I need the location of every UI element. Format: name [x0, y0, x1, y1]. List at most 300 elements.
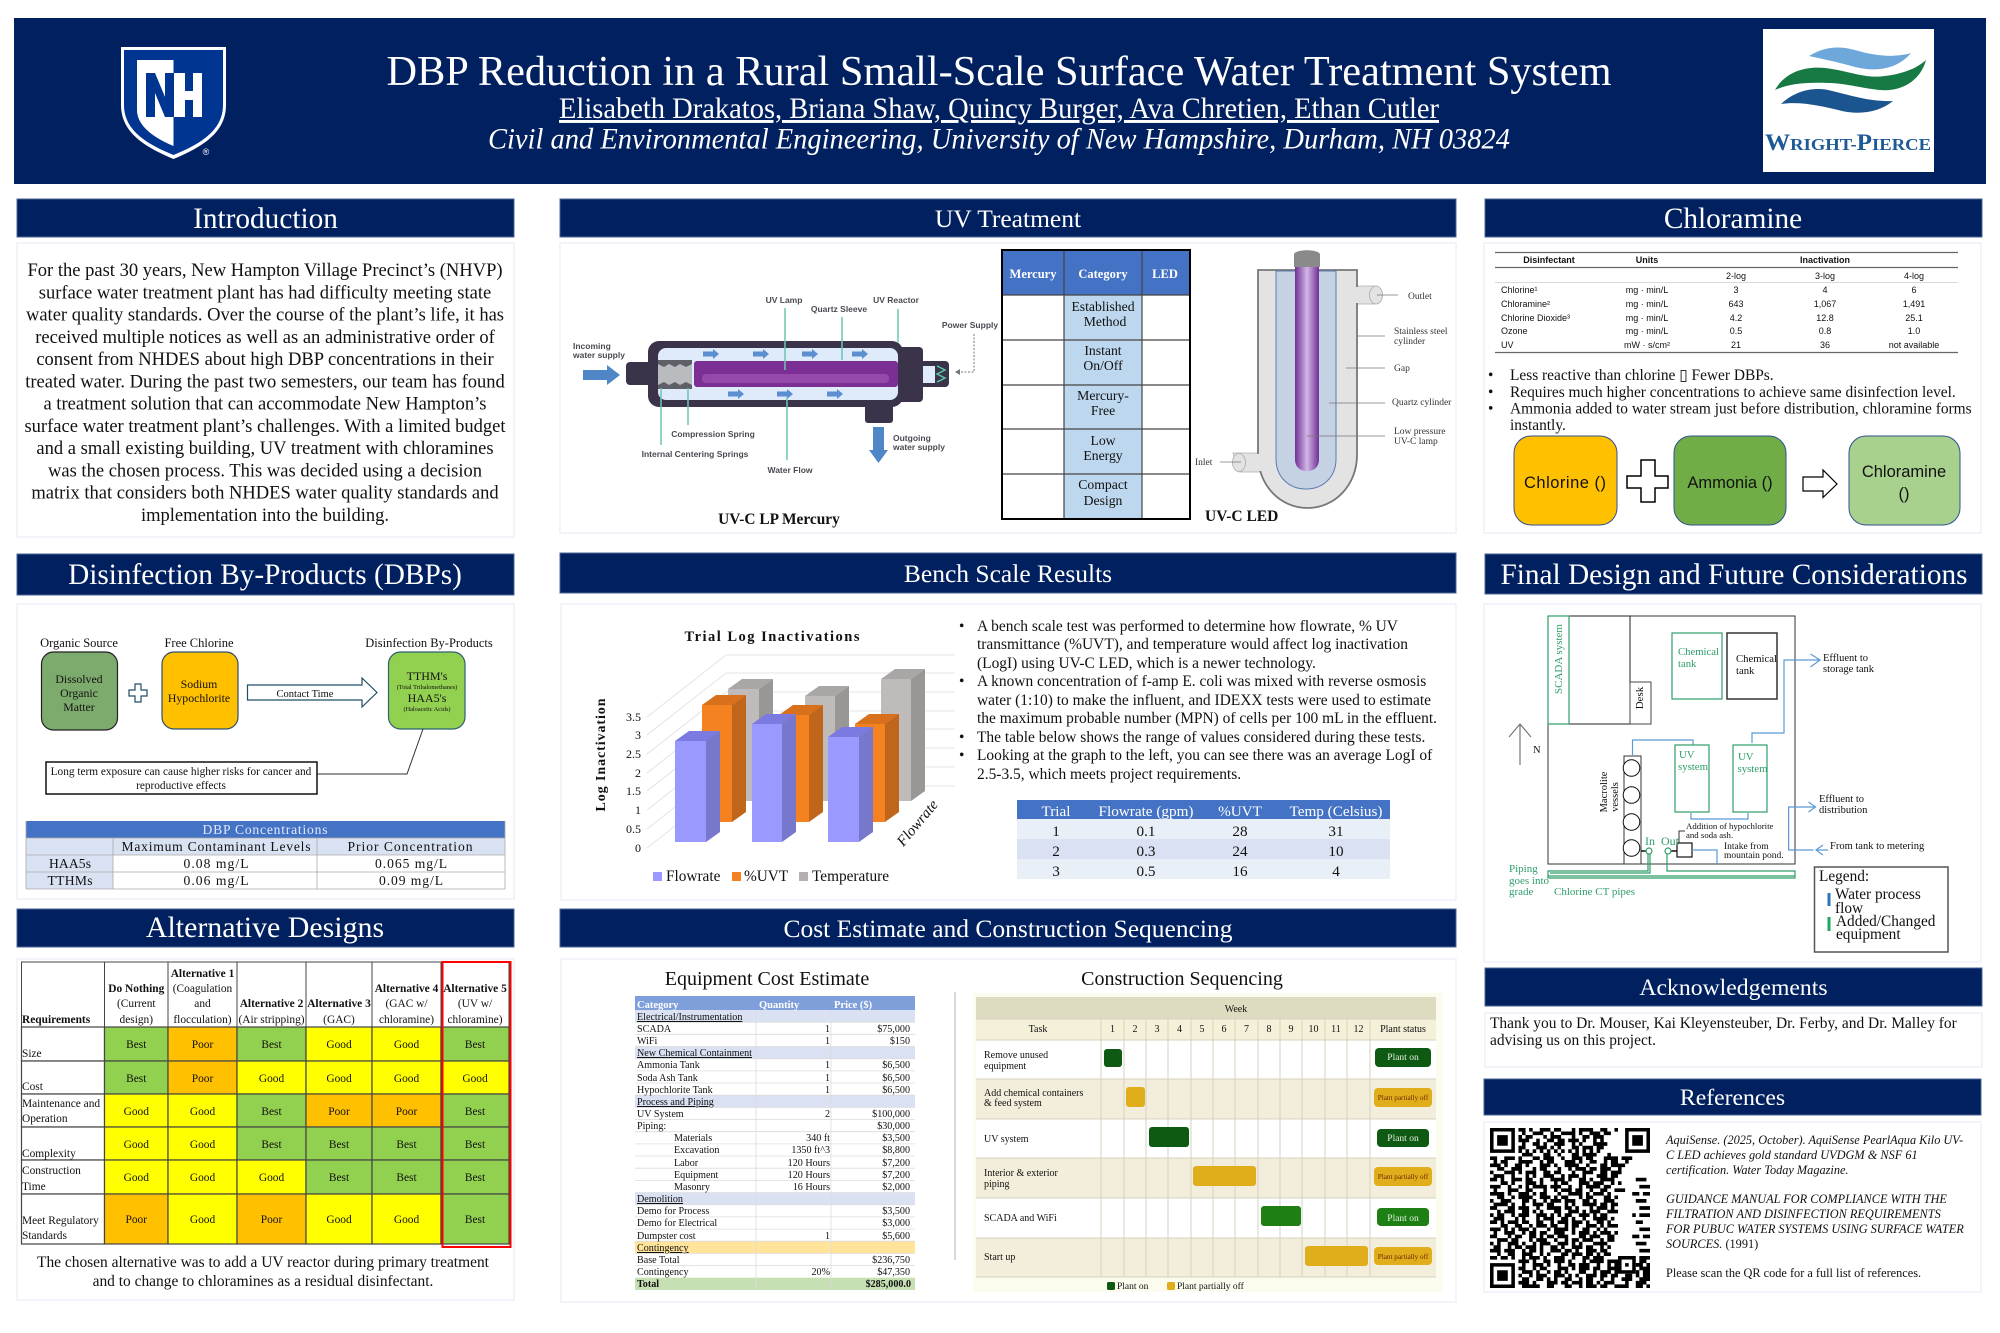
- text block: references: C LED achieves gold standard UVDGM & NSF 61: [1666, 1148, 1918, 1162]
- heading: references: [1484, 1079, 1981, 1115]
- decision matrix: Operation: [22, 1113, 68, 1125]
- diagram: DBP formation flow: Matter: [63, 700, 95, 714]
- diagram: plant floor plan: From tank to metering: [1830, 841, 1925, 852]
- decision matrix: Poor: [126, 1214, 147, 1226]
- decision matrix: Best: [261, 1039, 282, 1051]
- decision matrix: Good: [124, 1172, 149, 1184]
- gantt chart: construction sequencing: 6: [1222, 1024, 1226, 1035]
- text block: bench scale bullets: water (1:10) to make the influent, and IDEXX tests were used to estimate: [977, 692, 1431, 709]
- heading: cost estimate and sequencing: [560, 909, 1456, 947]
- table: equipment cost: Excavation: [674, 1145, 719, 1156]
- table: equipment cost: 1: [825, 1024, 830, 1035]
- decision matrix: Meet Regulatory: [22, 1215, 99, 1227]
- decision matrix: Good: [190, 1139, 215, 1151]
- panel: UV treatment: [560, 199, 1456, 533]
- table: equipment cost: 340 ft: [806, 1133, 830, 1144]
- icon: UNH shield logo: [121, 47, 226, 159]
- callout: health risks: [46, 762, 317, 794]
- table: equipment cost: 120 Hours: [788, 1170, 830, 1181]
- table: test ranges: 2: [1052, 843, 1060, 860]
- series: %UVT: [702, 695, 899, 822]
- gantt chart: construction sequencing: 10: [1308, 1024, 1318, 1035]
- table: CT values by disinfectant: mg · min/L: [1626, 285, 1668, 295]
- decision matrix: Best: [465, 1139, 486, 1151]
- table: test ranges: 0.1: [1137, 823, 1155, 840]
- decision matrix: Good: [124, 1106, 149, 1118]
- heading: cost estimate and sequencing: Cost Estimate and Construction Sequencing: [783, 914, 1233, 943]
- heading: chloramine: Chloramine: [1664, 203, 1802, 235]
- diagram: UV-C LP mercury reactor: Incoming: [573, 341, 611, 351]
- diagram: plant floor plan: tank: [1736, 665, 1755, 677]
- text block: bench scale bullets: [959, 618, 1437, 783]
- table: equipment cost: Soda Ash Tank: [637, 1073, 699, 1084]
- gantt chart: construction sequencing: Plant status: [1380, 1024, 1426, 1035]
- text block: references: GUIDANCE MANUAL FOR COMPLIANCE WITH THE: [1666, 1192, 1947, 1206]
- diagram: plant floor plan: SCADA system: [1553, 624, 1565, 694]
- text block: chloramine bullets: •: [1488, 367, 1493, 384]
- chart legend: Flowrate: [666, 868, 721, 885]
- decision matrix: Poor: [192, 1073, 213, 1085]
- text block: introduction body: For the past 30 years, New Hampton Village Precinct’s (NHVP): [27, 260, 503, 281]
- diagram: DBP formation flow: Organic: [60, 686, 98, 700]
- heading: UV treatment: UV Treatment: [935, 204, 1081, 233]
- table: test ranges: 24: [1232, 843, 1248, 860]
- gantt legend: Plant partially off: [1177, 1281, 1245, 1292]
- title: DBP Reduction in a Rural Small-Scale Surface Water Treatment System: [386, 49, 1612, 95]
- text block: bench scale bullets: A known concentration of f-amp E. coli was mixed with reverse osmosis: [977, 673, 1426, 690]
- table: Mercury vs LED categories: Established: [1071, 299, 1135, 314]
- diagram: UV-C LP mercury reactor: [572, 295, 998, 475]
- table: equipment cost: UV System: [637, 1109, 684, 1120]
- panel: chloramine: [1484, 199, 1982, 533]
- decision matrix: Good: [124, 1139, 149, 1151]
- heading: UV treatment: [560, 199, 1456, 237]
- decision matrix: (UV w/: [458, 998, 493, 1010]
- 3D bar chart: trial log inactivations: 2.5: [626, 747, 641, 761]
- 3D bar chart: trial log inactivations: 3.5: [626, 710, 641, 724]
- diagram: DBP formation flow: (Total Trihalomethanes): [397, 684, 457, 691]
- decision matrix: Complexity: [22, 1148, 76, 1160]
- panel: introduction: [17, 199, 514, 537]
- table: equipment cost: 1: [825, 1073, 830, 1084]
- plant status pills: [1374, 1048, 1432, 1265]
- callout: health risks: reproductive effects: [136, 780, 226, 792]
- table: Mercury vs LED categories: Energy: [1083, 448, 1123, 463]
- diagram: plant floor plan: Intake from: [1724, 841, 1769, 852]
- table: equipment cost: Process and Piping: [637, 1097, 714, 1108]
- gantt chart: construction sequencing: 1: [1110, 1024, 1115, 1035]
- table: equipment cost: Contingency: [637, 1243, 689, 1254]
- decision matrix: (Coagulation: [173, 983, 233, 995]
- decision matrix: Maintenance and: [22, 1098, 100, 1110]
- decision matrix: Good: [394, 1073, 419, 1085]
- table: equipment cost: $8,800: [882, 1145, 910, 1156]
- caption: chosen alternative: The chosen alternative was to add a UV reactor during primary treatment: [37, 1254, 490, 1271]
- decision matrix: Best: [261, 1106, 282, 1118]
- diagram: UV-C LED reactor: Inlet: [1195, 458, 1213, 468]
- table: CT values by disinfectant: 643: [1728, 299, 1744, 309]
- text block: introduction body: treated water. During the past two semesters, our team has found: [25, 371, 506, 392]
- table: test ranges: 3: [1052, 863, 1060, 880]
- plant status pills: Plant partially off: [1378, 1253, 1429, 1261]
- gantt chart: construction sequencing: [973, 993, 1443, 1292]
- table: CT values by disinfectant: [1495, 252, 1958, 352]
- text block: introduction body: consent from NHDES about high DBP concentrations in their: [36, 349, 495, 370]
- panel: alternative designs: [17, 909, 514, 1300]
- text block: references: Please scan the QR code for a full list of references.: [1666, 1266, 1921, 1280]
- text block: introduction body: and a small existing building, UV treatment with chloramines: [36, 438, 494, 459]
- floor plan legend: equipment: [1836, 926, 1901, 943]
- decision matrix: Poor: [396, 1106, 417, 1118]
- panel: disinfection by-products: [17, 554, 514, 899]
- diagram: DBP formation flow: [40, 636, 493, 794]
- gantt chart: construction sequencing: 2: [1132, 1024, 1138, 1035]
- gantt chart: construction sequencing: Task: [1029, 1024, 1047, 1035]
- gantt chart: construction sequencing: 5: [1200, 1024, 1204, 1035]
- heading: DBPs: [17, 554, 514, 595]
- diagram: plant floor plan: UV: [1738, 751, 1754, 763]
- table: equipment cost: Piping:: [637, 1121, 666, 1132]
- table: equipment cost: $7,200: [882, 1158, 910, 1169]
- table: CT values by disinfectant: Units: [1636, 255, 1658, 265]
- text block: chloramine bullets: •: [1488, 384, 1493, 401]
- gantt chart: construction sequencing: 12: [1354, 1024, 1364, 1035]
- gantt chart: construction sequencing: 3: [1154, 1024, 1160, 1035]
- table: equipment cost: New Chemical Containment: [637, 1048, 752, 1059]
- text block: introduction body: water quality standards. Over the course of the plant’s life, it has: [26, 304, 504, 326]
- heading: DBPs: Disinfection By-Products (DBPs): [68, 559, 462, 591]
- 3D bar chart: trial log inactivations: 2: [635, 766, 641, 780]
- table: equipment cost: Quantity: [759, 1000, 800, 1011]
- heading: alternative designs: Alternative Designs: [146, 911, 384, 944]
- text block: bench scale bullets: the maximum probable number (MPN) of cells per 100 mL in the effluent.: [977, 710, 1437, 727]
- decision matrix: Requirements: [22, 1014, 91, 1026]
- table: equipment cost: $7,200: [882, 1170, 910, 1181]
- table: Mercury vs LED categories: Mercury: [1010, 267, 1057, 281]
- text block: introduction body: was the chosen process. This was decided using a decision: [48, 460, 482, 482]
- decision matrix: Good: [394, 1214, 419, 1226]
- diagram: DBP formation flow: Free Chlorine: [164, 636, 234, 650]
- gantt chart: construction sequencing: UV system: [984, 1134, 1029, 1145]
- text block: bench scale bullets: The table below shows the range of values considered during these tests.: [977, 729, 1425, 746]
- table: equipment cost: $75,000: [877, 1024, 910, 1035]
- table: test ranges: 16: [1232, 863, 1248, 880]
- decision matrix: Alternative 2: [240, 998, 304, 1010]
- decision matrix: Best: [396, 1172, 417, 1184]
- decision matrix: Cost: [22, 1081, 44, 1093]
- diagram: plant floor plan: Effluent to: [1819, 794, 1864, 805]
- diagram: plant floor plan: Macrolite: [1599, 771, 1610, 812]
- decision matrix: Best: [329, 1139, 350, 1151]
- table: equipment cost: 1: [825, 1085, 830, 1096]
- floor plan legend: Water process: [1835, 886, 1921, 903]
- gantt chart: construction sequencing: 11: [1331, 1024, 1341, 1035]
- table: equipment cost: $47,350: [877, 1267, 910, 1278]
- gantt chart: construction sequencing: piping: [984, 1179, 1010, 1190]
- decision matrix: Poor: [192, 1039, 213, 1051]
- table: test ranges: [1017, 800, 1390, 880]
- table: Mercury vs LED categories: Category: [1078, 267, 1128, 281]
- decision matrix: Best: [126, 1039, 147, 1051]
- text block: references: SOURCES. (1991): [1666, 1237, 1758, 1251]
- table: Mercury vs LED categories: On/Off: [1083, 358, 1123, 373]
- table: equipment cost: Materials: [674, 1133, 712, 1144]
- diagram: UV-C LP mercury reactor: water supply: [892, 442, 945, 452]
- text block: bench scale bullets: •: [959, 747, 964, 764]
- text block: bench scale bullets: (LogI) using UV-C LED, which is a newer technology.: [977, 655, 1316, 672]
- table: CT values by disinfectant: 0.8: [1819, 326, 1831, 336]
- gantt bars: [1104, 1049, 1368, 1266]
- table: CT values by disinfectant: Chlorine Dioxide³: [1501, 313, 1570, 323]
- table: CT values by disinfectant: 1,491: [1903, 299, 1925, 309]
- gantt chart: construction sequencing: SCADA and WiFi: [984, 1213, 1057, 1224]
- table: equipment cost: 1: [825, 1036, 830, 1047]
- 3D bar chart: trial log inactivations: Log Inactivation: [594, 698, 609, 812]
- table: CT values by disinfectant: 4.2: [1730, 313, 1742, 323]
- decision matrix: Alternative 4: [375, 983, 439, 995]
- heading: acknowledgements: Acknowledgements: [1639, 975, 1828, 1001]
- caption: chosen alternative: [37, 1254, 490, 1290]
- decision matrix: Best: [329, 1172, 350, 1184]
- diagram: chlorine plus ammonia gives chloramine: Chloramine: [1862, 463, 1946, 481]
- text block: references: FOR PUBUC WATER SYSTEMS USING SURFACE WATER: [1665, 1222, 1964, 1236]
- diagram: DBP formation flow: Hypochlorite: [168, 691, 230, 705]
- text block: references: FILTRATION AND DISINFECTION REQUIREMENTS: [1665, 1207, 1941, 1221]
- table: equipment cost: Electrical/Instrumentation: [637, 1012, 742, 1023]
- decision matrix: Poor: [328, 1106, 350, 1118]
- 3D bar chart: trial log inactivations: 1.5: [626, 784, 641, 798]
- heading: equipment cost estimate: Equipment Cost Estimate: [665, 968, 869, 990]
- table: Mercury vs LED categories: Low: [1090, 433, 1116, 448]
- diagram: UV-C LP mercury reactor: Internal Centering Springs: [642, 449, 749, 459]
- gantt chart: construction sequencing: Remove unused: [984, 1050, 1048, 1061]
- table: Mercury vs LED categories: Mercury-: [1077, 388, 1129, 403]
- table: CT values by disinfectant: 36: [1820, 340, 1830, 350]
- decision matrix: Size: [22, 1048, 42, 1060]
- table: equipment cost: $2,000: [882, 1182, 910, 1193]
- text block: introduction body: [17, 243, 514, 537]
- table: test ranges: 4: [1332, 863, 1340, 880]
- diagram: plant floor plan: Chlorine CT pipes: [1554, 886, 1635, 898]
- gantt chart: construction sequencing: 8: [1266, 1024, 1272, 1035]
- table: equipment cost: Base Total: [637, 1255, 680, 1266]
- decision matrix: Standards: [22, 1230, 67, 1242]
- decision matrix: Good: [394, 1039, 419, 1051]
- table: test ranges: 28: [1232, 823, 1248, 840]
- table: CT values by disinfectant: 0.5: [1730, 326, 1742, 336]
- text block: introduction body: implementation into the building.: [141, 505, 389, 526]
- plant status pills: Plant on: [1387, 1053, 1419, 1063]
- decision matrix: Best: [465, 1172, 486, 1184]
- table: CT values by disinfectant: 6: [1911, 285, 1917, 295]
- table: DBP concentrations: Prior Concentration: [348, 839, 473, 854]
- decision matrix: and: [194, 998, 211, 1010]
- gantt chart: construction sequencing: Start up: [984, 1252, 1015, 1263]
- table: equipment cost: Demolition: [637, 1194, 683, 1205]
- table: equipment cost: 1350 ft^3: [791, 1145, 830, 1156]
- diagram: plant floor plan: grade: [1509, 886, 1534, 898]
- text block: chloramine bullets: Less reactive than chlorine ▯ Fewer DBPs.: [1510, 367, 1774, 384]
- diagram: plant floor plan: Out: [1661, 834, 1680, 848]
- table: CT values by disinfectant: 1.0: [1908, 326, 1920, 336]
- diagram: DBP formation flow: Disinfection By-Products: [365, 636, 493, 650]
- table: equipment cost: WiFi: [637, 1036, 658, 1047]
- table: equipment cost: $100,000: [872, 1109, 910, 1120]
- text block: chloramine bullets: Requires much higher concentrations to achieve same disinfection level.: [1510, 384, 1956, 401]
- diagram: plant floor plan: Effluent to: [1823, 653, 1868, 664]
- table: CT values by disinfectant: mg · min/L: [1626, 299, 1668, 309]
- table: CT values by disinfectant: Chlorine¹: [1501, 285, 1538, 295]
- table: CT values by disinfectant: Inactivation: [1800, 255, 1850, 265]
- gantt legend: Plant on: [1117, 1282, 1149, 1292]
- decision matrix: Time: [22, 1181, 46, 1193]
- heading: acknowledgements: [1485, 968, 1982, 1006]
- table: equipment cost: Equipment: [674, 1170, 718, 1181]
- table: test ranges: 31: [1328, 823, 1344, 840]
- decision matrix: (Air stripping): [238, 1014, 305, 1026]
- diagram: UV-C LP mercury reactor: Water Flow: [767, 465, 813, 475]
- text block: introduction body: matrix that considers both NHDES water quality standards and: [31, 483, 499, 504]
- table: equipment cost: Hypochlorite Tank: [637, 1085, 714, 1096]
- table: Mercury vs LED categories: Free: [1091, 403, 1115, 418]
- gantt chart: construction sequencing: Week: [1225, 1004, 1247, 1015]
- table: test ranges: %UVT: [1218, 803, 1263, 820]
- table: CT values by disinfectant: 2-log: [1726, 271, 1746, 281]
- decision matrix: flocculation): [173, 1014, 232, 1026]
- table: equipment cost: 16 Hours: [793, 1182, 830, 1193]
- table: equipment cost: $6,500: [882, 1085, 910, 1096]
- affiliation: Civil and Environmental Engineering, University of New Hampshire, Durham, NH 03824: [488, 124, 1510, 156]
- table: equipment cost: $30,000: [877, 1121, 910, 1132]
- table: equipment cost: [635, 996, 915, 1290]
- text block: references: [1665, 1133, 1964, 1280]
- text block: acknowledgements: Thank you to Dr. Mouser, Kai Kleyensteuber, Dr. Ferby, and Dr. Malley for: [1490, 1015, 1957, 1032]
- QR code: [1490, 1128, 1650, 1288]
- table: DBP concentrations: 0.065 mg/L: [375, 856, 447, 871]
- table: CT values by disinfectant: 4: [1822, 285, 1828, 295]
- decision matrix: Alternative 3: [307, 998, 371, 1010]
- diagram: UV-C LED reactor: Quartz cylinder: [1392, 398, 1452, 408]
- table: DBP concentrations: 0.09 mg/L: [379, 873, 443, 888]
- panel: bench scale results: [560, 553, 1456, 900]
- plant status pills: Plant partially off: [1378, 1094, 1429, 1102]
- decision matrix: Good: [190, 1214, 215, 1226]
- table: equipment cost: $150: [890, 1036, 910, 1047]
- decision matrix: [22, 962, 509, 1244]
- text block: chloramine bullets: [1488, 367, 1972, 434]
- heading: bench scale results: Bench Scale Results: [904, 559, 1112, 588]
- table: CT values by disinfectant: not available: [1889, 340, 1939, 350]
- decision matrix: Good: [190, 1172, 215, 1184]
- table: CT values by disinfectant: 12.8: [1816, 313, 1834, 323]
- decision matrix: chloramine): [447, 1014, 503, 1026]
- decision matrix: Best: [126, 1073, 147, 1085]
- decision matrix: Best: [465, 1106, 486, 1118]
- diagram: UV-C LP mercury reactor: Quartz Sleeve: [811, 304, 867, 314]
- heading: introduction: Introduction: [193, 203, 338, 235]
- plant status pills: Plant on: [1387, 1214, 1419, 1224]
- table: test ranges: 1: [1052, 823, 1060, 840]
- diagram: DBP formation flow: Contact Time: [277, 689, 334, 700]
- table: equipment cost: Demo for Electrical: [637, 1218, 717, 1229]
- table: equipment cost: Category: [637, 1000, 679, 1011]
- decision matrix: Good: [259, 1073, 284, 1085]
- table: Mercury vs LED categories: Compact: [1078, 477, 1128, 492]
- table: equipment cost: Ammonia Tank: [637, 1060, 701, 1071]
- callout: health risks: Long term exposure can cause higher risks for cancer and: [51, 766, 312, 778]
- table: CT values by disinfectant: mg · min/L: [1626, 313, 1668, 323]
- diagram: plant floor plan: In: [1645, 834, 1655, 848]
- decision matrix: Alternative 1: [171, 968, 235, 980]
- table: equipment cost: Demo for Process: [637, 1206, 709, 1217]
- table: equipment cost: Total: [637, 1279, 659, 1290]
- diagram: plant floor plan: Piping: [1509, 863, 1538, 875]
- decision matrix: Alternative 5: [443, 983, 507, 995]
- diagram: UV-C LP mercury reactor: Power Supply: [942, 320, 998, 330]
- text block: chloramine bullets: •: [1488, 400, 1493, 418]
- table: Mercury vs LED categories: Instant: [1084, 343, 1122, 358]
- diagram: UV-C LP mercury reactor: UV Lamp: [766, 295, 802, 305]
- gantt chart: construction sequencing: 9: [1288, 1024, 1294, 1035]
- diagram: UV-C LED reactor: UV-C lamp: [1394, 437, 1438, 447]
- 3D bar chart: trial log inactivations: 1: [635, 803, 641, 817]
- 3D bar chart: trial log inactivations: Trial Log Inactivations: [684, 629, 860, 645]
- diagram: plant floor plan: tank: [1678, 658, 1697, 670]
- table: CT values by disinfectant: mW · s/cm²: [1624, 340, 1670, 350]
- heading: final design: Final Design and Future Considerations: [1500, 559, 1968, 591]
- series: temperature: [728, 669, 925, 801]
- table: CT values by disinfectant: UV: [1501, 340, 1514, 350]
- diagram: plant floor plan: Chemical: [1678, 646, 1719, 658]
- table: CT values by disinfectant: Chloramine²: [1501, 299, 1550, 309]
- table: DBP concentrations: 0.06 mg/L: [184, 873, 248, 888]
- text block: bench scale bullets: •: [959, 673, 964, 690]
- panel: acknowledgements: [1485, 968, 1982, 1067]
- decision matrix: (GAC w/: [385, 998, 428, 1010]
- decision matrix: Best: [465, 1214, 486, 1226]
- gantt chart: construction sequencing: 4: [1177, 1024, 1182, 1035]
- table: equipment cost: Dumpster cost: [637, 1231, 696, 1242]
- decision matrix: Best: [396, 1139, 417, 1151]
- label: UV-C LED: UV-C LED: [1205, 508, 1278, 525]
- diagram: chlorine plus ammonia gives chloramine: Ammonia (): [1687, 474, 1773, 492]
- diagram: UV-C LP mercury reactor: UV Reactor: [873, 295, 920, 305]
- diagram: plant floor plan: vessels: [1610, 782, 1621, 812]
- caption: chosen alternative: and to change to chloramines as a residual disinfectant.: [93, 1273, 433, 1290]
- floor plan legend: [1814, 867, 1948, 952]
- diagram: chlorine plus ammonia gives chloramine: Chlorine (): [1524, 474, 1606, 492]
- table: equipment cost: $6,500: [882, 1073, 910, 1084]
- diagram: plant floor plan: mountain pond.: [1724, 851, 1784, 861]
- authors: Elisabeth Drakatos, Briana Shaw, Quincy Burger, Ava Chretien, Ethan Cutler: [559, 93, 1439, 125]
- table: equipment cost: Contingency: [637, 1267, 689, 1278]
- decision matrix: Good: [259, 1172, 284, 1184]
- gantt chart: construction sequencing: Add chemical containers: [984, 1088, 1084, 1099]
- decision matrix: Best: [261, 1139, 282, 1151]
- table: CT values by disinfectant: 1,067: [1814, 299, 1836, 309]
- diagram: plant floor plan: [1509, 616, 1948, 952]
- table: CT values by disinfectant: 3-log: [1815, 271, 1835, 281]
- panel: final design and future considerations: [1484, 554, 1982, 962]
- table: equipment cost: 1: [825, 1231, 830, 1242]
- 3D bar chart: trial log inactivations: 0.5: [626, 822, 641, 836]
- table: equipment cost: 2: [825, 1109, 830, 1120]
- decision matrix: design): [120, 1014, 153, 1026]
- gantt chart: construction sequencing: Interior & exterior: [984, 1168, 1059, 1179]
- table: CT values by disinfectant: 25.1: [1905, 313, 1923, 323]
- diagram: DBP formation flow: Dissolved: [55, 672, 103, 686]
- floor plan legend: flow: [1835, 900, 1863, 917]
